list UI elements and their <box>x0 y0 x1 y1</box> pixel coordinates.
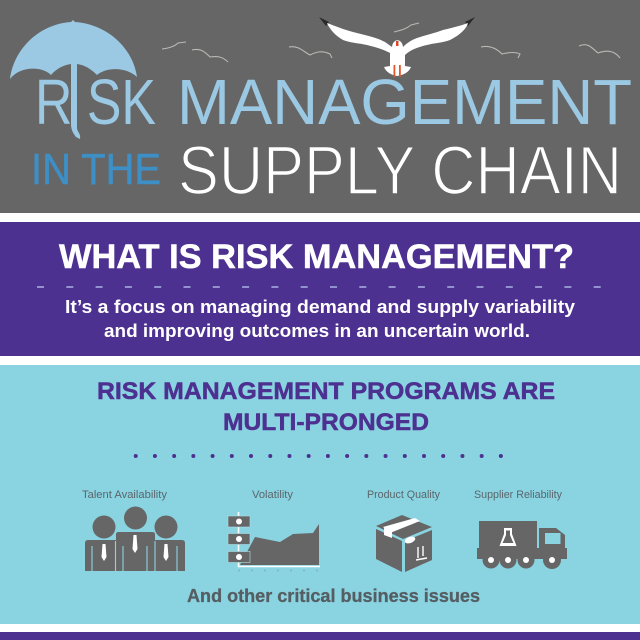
heading: MULTI-PRONGED <box>223 409 429 436</box>
labels <box>82 489 562 501</box>
panel: multi-pronged programs <box>0 365 640 624</box>
labels: Talent Availability <box>82 489 167 501</box>
icon: truck <box>477 521 567 569</box>
labels: Product Quality <box>367 489 440 501</box>
labels: Volatility <box>252 489 294 501</box>
dotted divider <box>136 454 503 458</box>
title: risk: R SK <box>35 66 156 138</box>
description text <box>65 297 575 341</box>
icon: box <box>376 515 432 572</box>
labels: Supplier Reliability <box>474 489 562 501</box>
panel: what is risk management <box>0 222 640 356</box>
description text: It’s a focus on managing demand and supply variability <box>65 297 575 317</box>
description text: and improving outcomes in an uncertain world. <box>104 321 530 341</box>
heading: RISK MANAGEMENT PROGRAMS ARE <box>97 378 555 405</box>
closing text: And other critical business issues <box>187 586 480 606</box>
title: in the: IN THE <box>31 145 161 194</box>
heading <box>97 378 555 436</box>
icon: talent people <box>85 506 185 571</box>
heading: WHAT IS RISK MANAGEMENT? <box>59 238 574 276</box>
icon: seagull <box>319 17 475 77</box>
panel: title header <box>0 0 640 213</box>
icon: volatility chart <box>228 512 320 570</box>
bottom band <box>0 632 640 640</box>
icon: small birds <box>162 23 620 62</box>
title: management: MANAGEMENT <box>177 66 632 138</box>
icon: umbrella <box>10 20 137 139</box>
dashed divider <box>37 286 604 288</box>
